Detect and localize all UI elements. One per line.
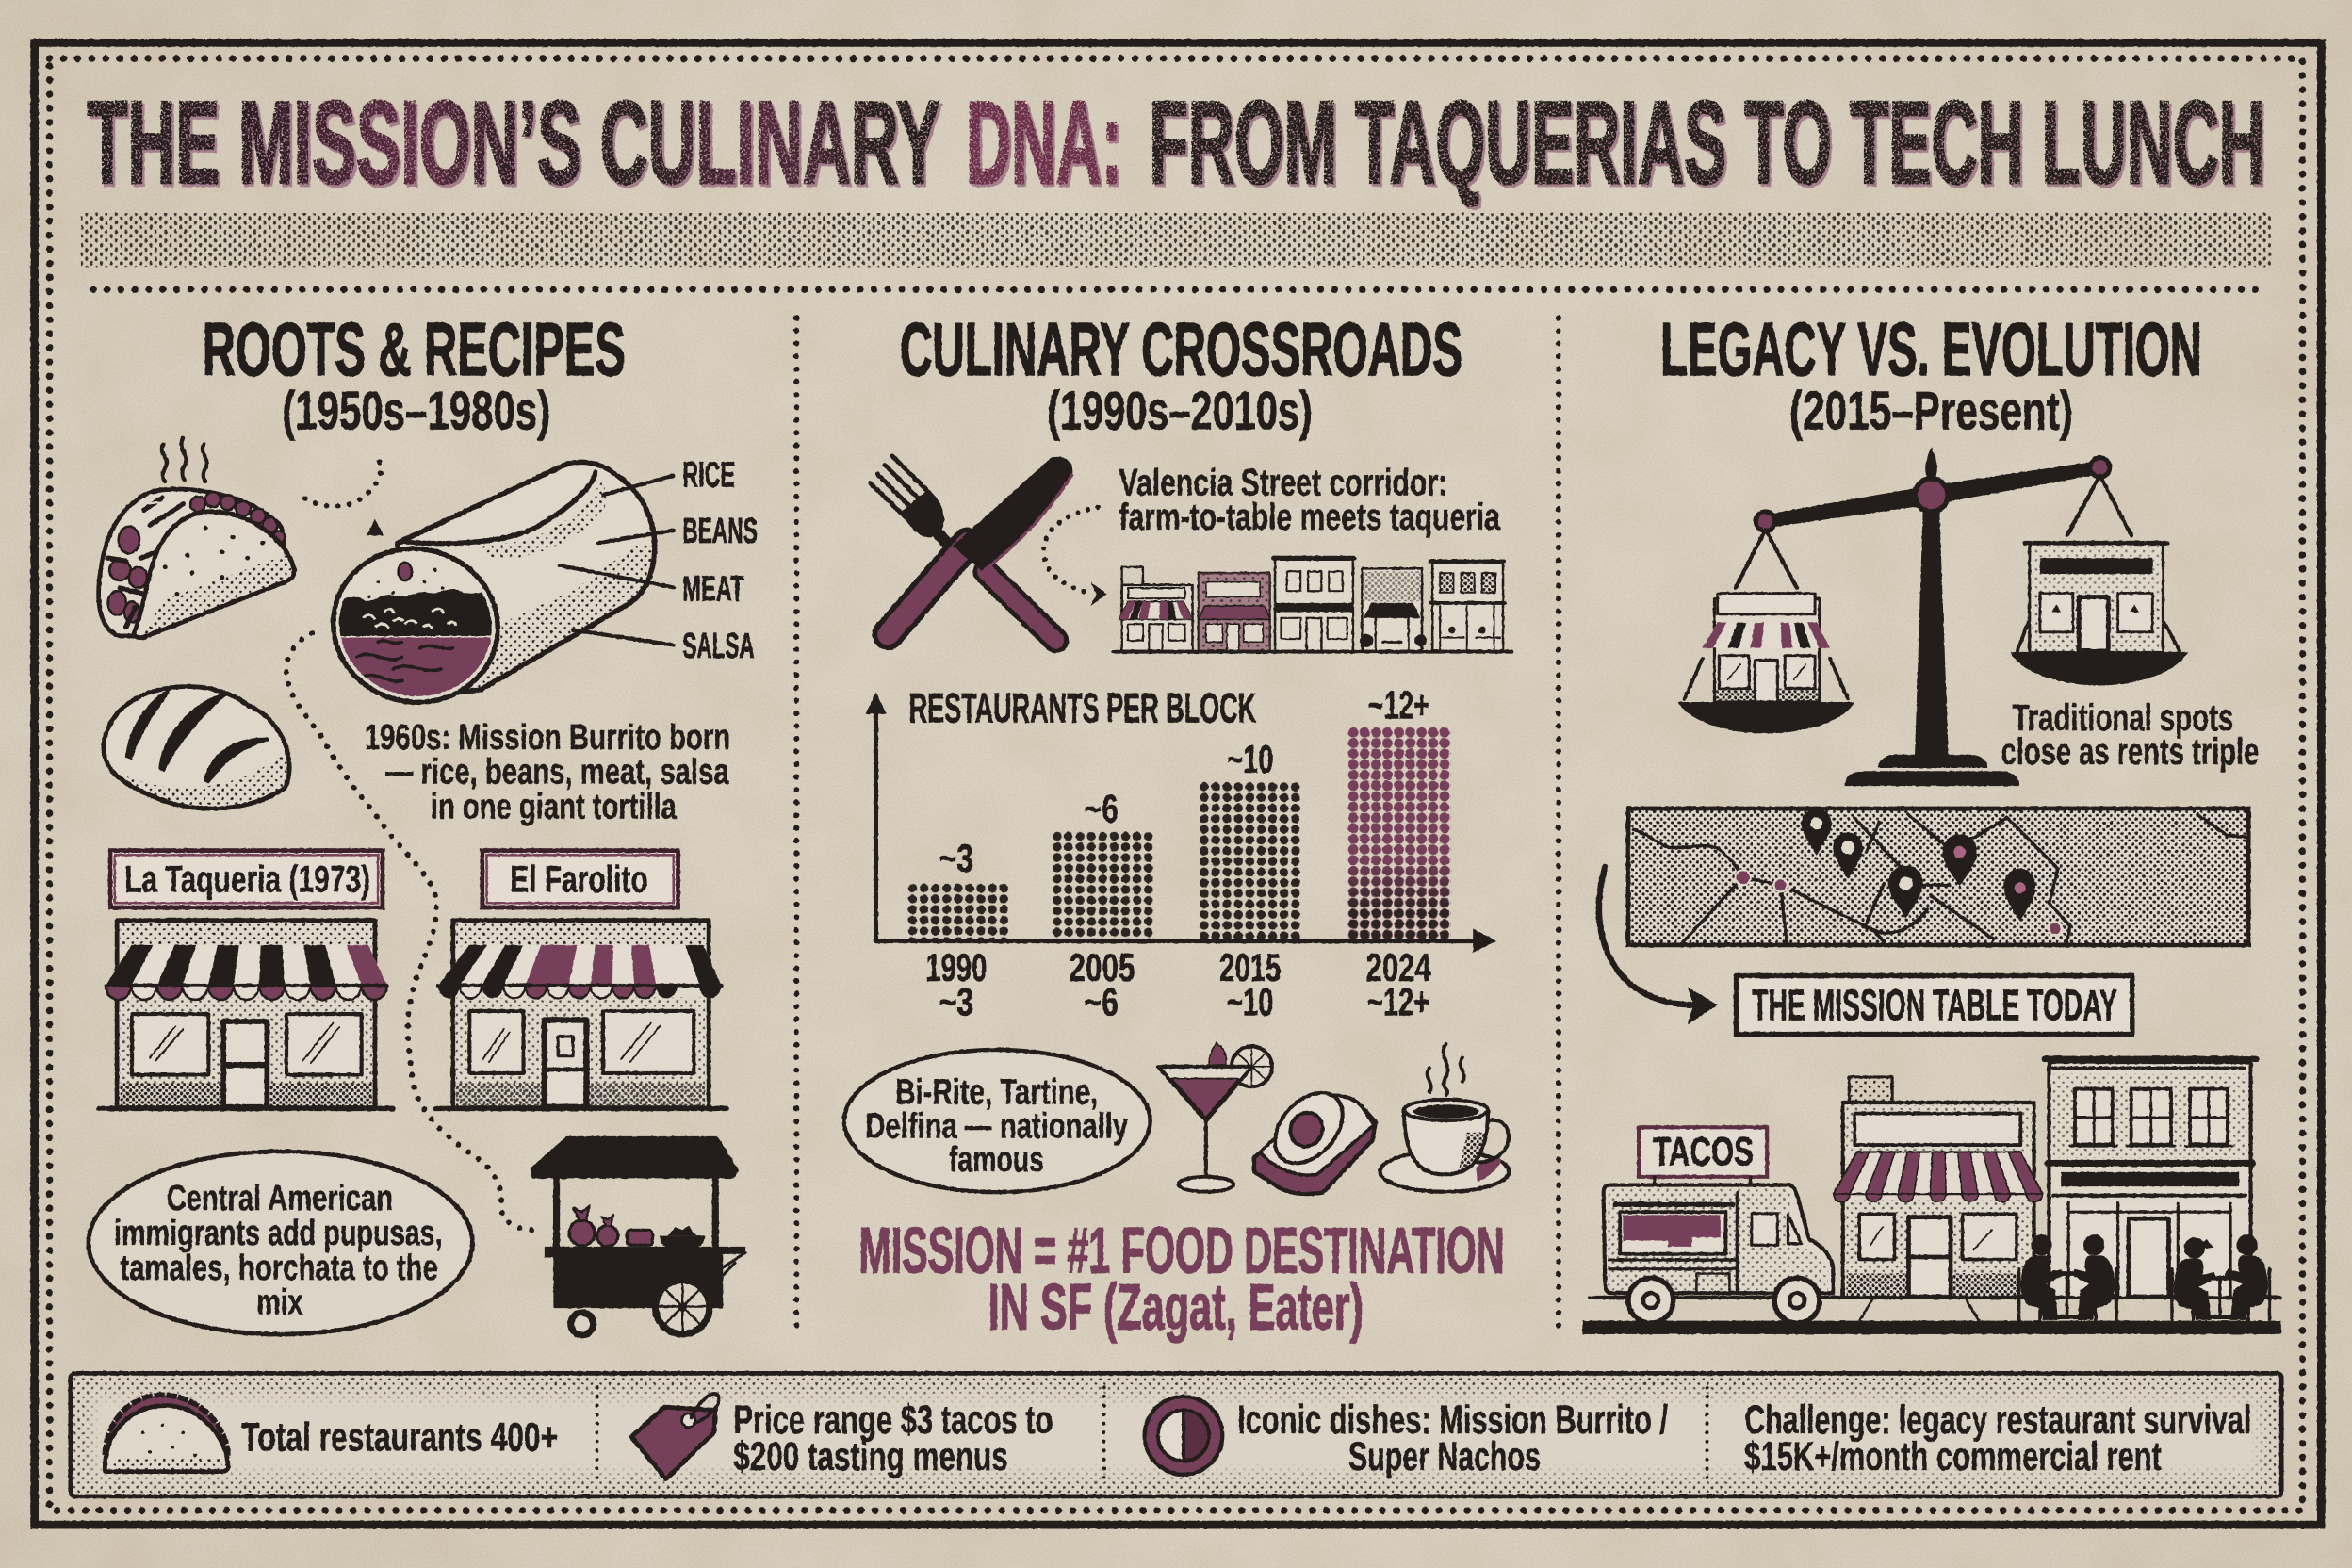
icon: half circle dish	[1145, 1396, 1222, 1475]
panel: culinary crossroads	[844, 307, 1512, 1343]
stat: price range: $200 tasting menus	[733, 1434, 1008, 1479]
cross-section	[318, 533, 512, 717]
right pan: modern storefront	[2010, 543, 2188, 685]
heading: roots and recipes	[203, 307, 626, 441]
value labels above bars: ~10	[1227, 738, 1273, 781]
sign: la taqueria	[110, 851, 383, 907]
callout: central american immigrants: mix	[256, 1282, 303, 1322]
icon: taco	[105, 1395, 228, 1472]
building 4	[1360, 568, 1427, 651]
dotted arrow: corridor to street	[1044, 507, 1107, 606]
headline: food destination	[858, 1215, 1505, 1343]
value labels above bars: ~12+	[1368, 683, 1429, 727]
bar 2005	[1052, 831, 1153, 940]
text: burrito origin	[365, 717, 730, 826]
building 2	[1199, 573, 1270, 651]
icon: crossed fork and knife	[870, 456, 1072, 641]
callout lines	[560, 476, 674, 645]
icon: steam over taco	[162, 438, 207, 482]
header dotted rule	[93, 287, 2265, 292]
label: the mission table today: THE MISSION TABLE TODAY	[1752, 980, 2117, 1029]
value labels above bars: ~6	[1084, 787, 1119, 830]
label: rice: RICE	[682, 455, 735, 496]
map: the mission with pins	[1628, 808, 2248, 945]
panel: roots and recipes	[89, 307, 758, 1335]
headline: food destination: MISSION = #1 FOOD DESTINATION	[858, 1215, 1505, 1287]
heading: culinary crossroads: (1990s–2010s)	[1047, 381, 1313, 441]
sign: el farolito	[482, 851, 678, 907]
callout: central american immigrants	[89, 1152, 472, 1334]
year labels: 2005	[1070, 946, 1135, 989]
label: the mission table today	[1737, 975, 2132, 1035]
stat: total restaurants	[105, 1395, 558, 1472]
sign: la taqueria: La Taqueria (1973)	[124, 858, 370, 900]
text: traditional spots: Traditional spots	[2012, 697, 2233, 739]
year labels: ~3	[939, 981, 973, 1024]
icon: egg toast	[1254, 1080, 1376, 1194]
map pins	[1802, 808, 2035, 921]
text: valencia street: farm-to-table meets taqueria	[1119, 497, 1500, 538]
column divider left	[794, 318, 798, 1332]
stat: iconic dishes: Super Nachos	[1348, 1434, 1541, 1479]
year labels	[925, 946, 1431, 1024]
diners left table	[2019, 1234, 2116, 1320]
bar 2024	[1348, 727, 1451, 940]
text: burrito origin: in one giant tortilla	[431, 786, 678, 826]
title: THE MISSION’S CULINARY	[87, 78, 940, 208]
chart axes	[865, 692, 1497, 953]
callout: central american immigrants: Central American	[167, 1178, 393, 1218]
stat: iconic dishes	[1145, 1396, 1668, 1479]
icon: taco	[99, 489, 294, 638]
text: burrito origin: — rice, beans, meat, salsa	[385, 752, 729, 792]
illustration: valencia street row	[1113, 558, 1512, 652]
year labels: 2024	[1366, 946, 1431, 989]
label: salsa: SALSA	[682, 626, 755, 666]
text: burrito origin: 1960s: Mission Burrito born	[365, 717, 730, 758]
building 1	[1119, 567, 1193, 651]
icon: burrito with labelled layers	[318, 455, 758, 717]
chart title: RESTAURANTS PER BLOCK	[909, 685, 1256, 731]
heading: culinary crossroads: CULINARY CROSSROADS	[900, 307, 1462, 391]
year labels: ~10	[1227, 981, 1273, 1024]
callout: famous restaurants: Bi-Rite, Tartine,	[895, 1072, 1098, 1113]
building 3	[1273, 558, 1354, 651]
callout: famous restaurants: Delfina — nationally	[865, 1105, 1129, 1146]
panel: legacy vs evolution	[1582, 307, 2281, 1334]
year labels: 2015	[1219, 946, 1281, 989]
heading: culinary crossroads	[900, 307, 1462, 441]
value labels above bars	[939, 683, 1429, 880]
dotted path: tortilla to cart	[286, 633, 534, 1230]
taco truck	[1604, 1127, 1833, 1323]
value labels above bars: ~3	[939, 837, 973, 880]
storefront: el farolito	[435, 921, 727, 1108]
text: valencia street: Valencia Street corridor:	[1119, 462, 1447, 503]
left pan: traditional storefront	[1678, 594, 1854, 733]
year labels: ~6	[1084, 981, 1119, 1024]
heading: legacy vs evolution	[1660, 307, 2202, 441]
heading: legacy vs evolution: (2015–Present)	[1789, 381, 2073, 441]
label: beans: BEANS	[682, 511, 758, 551]
icon: price tag	[631, 1394, 719, 1479]
title: DNA:	[966, 78, 1122, 208]
sign: el farolito: El Farolito	[510, 858, 648, 900]
stat: challenge	[1744, 1397, 2251, 1479]
stat: price range: Price range $3 tacos to	[733, 1397, 1053, 1443]
curved arrow: map to table today	[1599, 867, 1718, 1024]
taco truck: TACOS	[1653, 1130, 1754, 1175]
street scene	[1582, 1059, 2281, 1334]
callout: central american immigrants: immigrants add pupusas,	[114, 1213, 443, 1253]
arrow tip	[366, 519, 384, 535]
headline: food destination: IN SF (Zagat, Eater)	[988, 1270, 1364, 1343]
bar chart: restaurants per block	[865, 683, 1497, 1024]
stat: total restaurants: Total restaurants 400+	[241, 1414, 558, 1460]
icon: coffee cup	[1380, 1044, 1509, 1192]
icon: cocktail	[1158, 1042, 1272, 1192]
icon: food cart	[531, 1137, 745, 1335]
sidewalk	[1582, 1321, 2281, 1334]
stat dividers	[597, 1387, 1707, 1482]
footer stats bar	[71, 1373, 2281, 1496]
text: valencia street	[1119, 462, 1500, 538]
column divider right	[1557, 318, 1560, 1332]
icon: balance scale	[1678, 447, 2188, 786]
label: meat: MEAT	[682, 569, 744, 610]
callout: central american immigrants: tamales, horchata to the	[120, 1248, 438, 1288]
stat: price range	[631, 1394, 1053, 1479]
bar 1990	[906, 883, 1009, 940]
callout: famous restaurants	[844, 1050, 1151, 1192]
bar 2015	[1199, 781, 1301, 940]
halftone banner strip	[81, 213, 2271, 267]
dotted path: taco to burrito	[304, 462, 381, 506]
middle restaurant with awning	[1834, 1077, 2042, 1320]
text: traditional spots: close as rents triple	[2001, 731, 2259, 773]
text: traditional spots	[2001, 697, 2259, 773]
tall restaurant building	[2045, 1059, 2257, 1298]
heading: roots and recipes: ROOTS & RECIPES	[203, 307, 626, 391]
heading: roots and recipes: (1950s–1980s)	[282, 381, 550, 441]
stat: challenge: $15K+/month commercial rent	[1744, 1434, 2162, 1479]
building 5	[1429, 561, 1505, 651]
year labels: ~12+	[1367, 981, 1429, 1024]
diners right table	[2172, 1234, 2269, 1320]
storefront: la taqueria	[99, 921, 393, 1108]
callout: famous restaurants: famous	[949, 1139, 1044, 1180]
icon: bread loaf	[99, 687, 297, 810]
year labels: 1990	[925, 946, 987, 989]
stat: iconic dishes: Iconic dishes: Mission Burrito /	[1237, 1397, 1668, 1443]
